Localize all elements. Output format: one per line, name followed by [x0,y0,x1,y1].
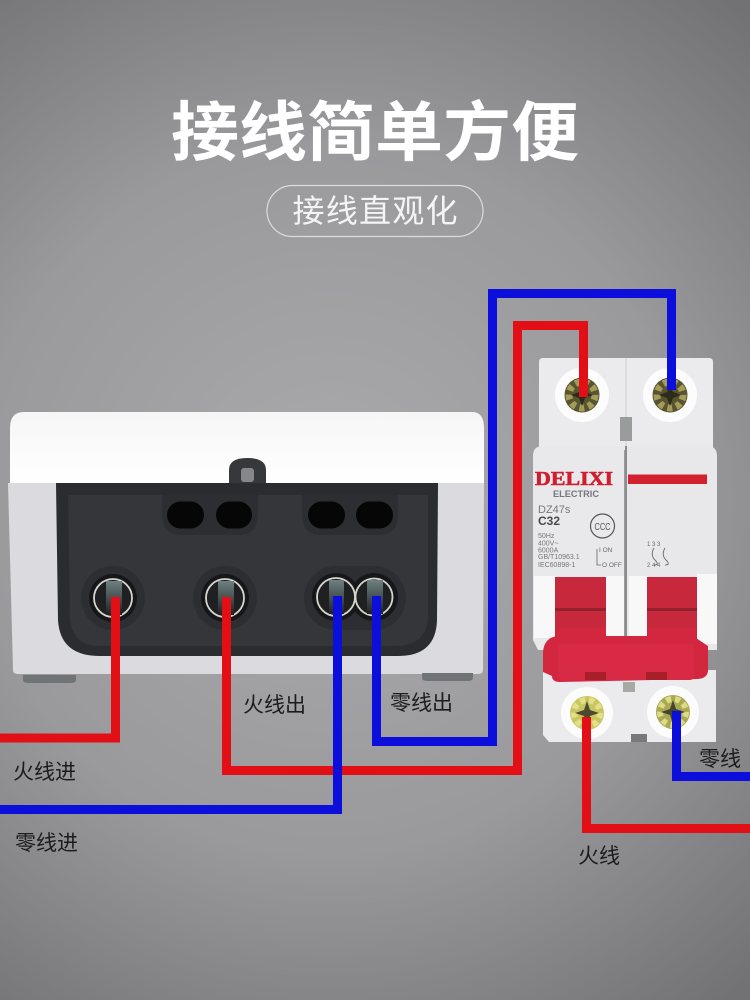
brand sub label: ELECTRIC [553,489,599,500]
on off legend: I ON [599,547,613,554]
mounting tab [229,458,266,484]
breaker right front [627,446,717,650]
blue wire: neutral in [0,596,338,810]
circuit breaker [533,358,717,742]
breaker top section [539,358,713,450]
model labels: 6000A [538,548,559,554]
top screw right [643,368,697,422]
red wire: live out to breaker [226,326,584,770]
model labels: IEC60898-1 [538,562,575,569]
model labels: C32 [538,514,560,528]
distribution box [8,412,484,683]
dark terminal panel [56,483,438,656]
red wire: breaker live output [586,717,750,828]
box lid [10,412,484,483]
label: live out: 火线出 [243,694,306,717]
box body [8,483,484,674]
on off legend: O OFF [602,562,622,569]
blue wire: neutral out to breaker [376,294,672,742]
bottom screw left [561,687,613,739]
toggle handle [543,628,708,682]
CCC mark: CCC [594,521,611,533]
handle side guards [534,574,717,644]
red wire: live in [0,597,116,738]
title: 接线简单方便 [171,96,579,169]
circuit symbol: 2 4 4 [647,563,661,569]
circuit symbol: 1 3 3 [647,542,661,548]
bottom screw right [647,686,699,738]
model labels: 50Hz [538,533,555,540]
label: neutral out: 零线出 [390,692,453,715]
rubber feet [23,675,76,683]
model labels: GB/T10963.1 [538,554,580,561]
terminal holes [81,566,406,630]
label: neutral: 零线 [699,748,741,771]
subtitle pill: 接线直观化 [292,193,458,229]
red stripe [628,474,707,484]
breaker left front [533,446,624,650]
model labels [538,504,580,569]
circuit symbol [647,542,668,569]
blue wire: breaker neutral output [676,711,750,776]
breaker bottom section [543,670,716,742]
label: live in: 火线进 [13,761,76,784]
label: neutral in: 零线进 [15,832,78,855]
toggle windows [555,577,606,643]
slot lobes [162,495,398,535]
model labels: DZ47s [538,504,571,516]
top screw left [555,368,609,422]
CCC mark [590,514,614,538]
oval slots [167,502,393,528]
model labels: 400V~ [538,540,558,548]
subtitle pill [267,186,483,236]
on off legend [597,547,622,569]
label: live: 火线 [578,845,620,868]
brand DELIXI: DELIXI [535,468,613,490]
